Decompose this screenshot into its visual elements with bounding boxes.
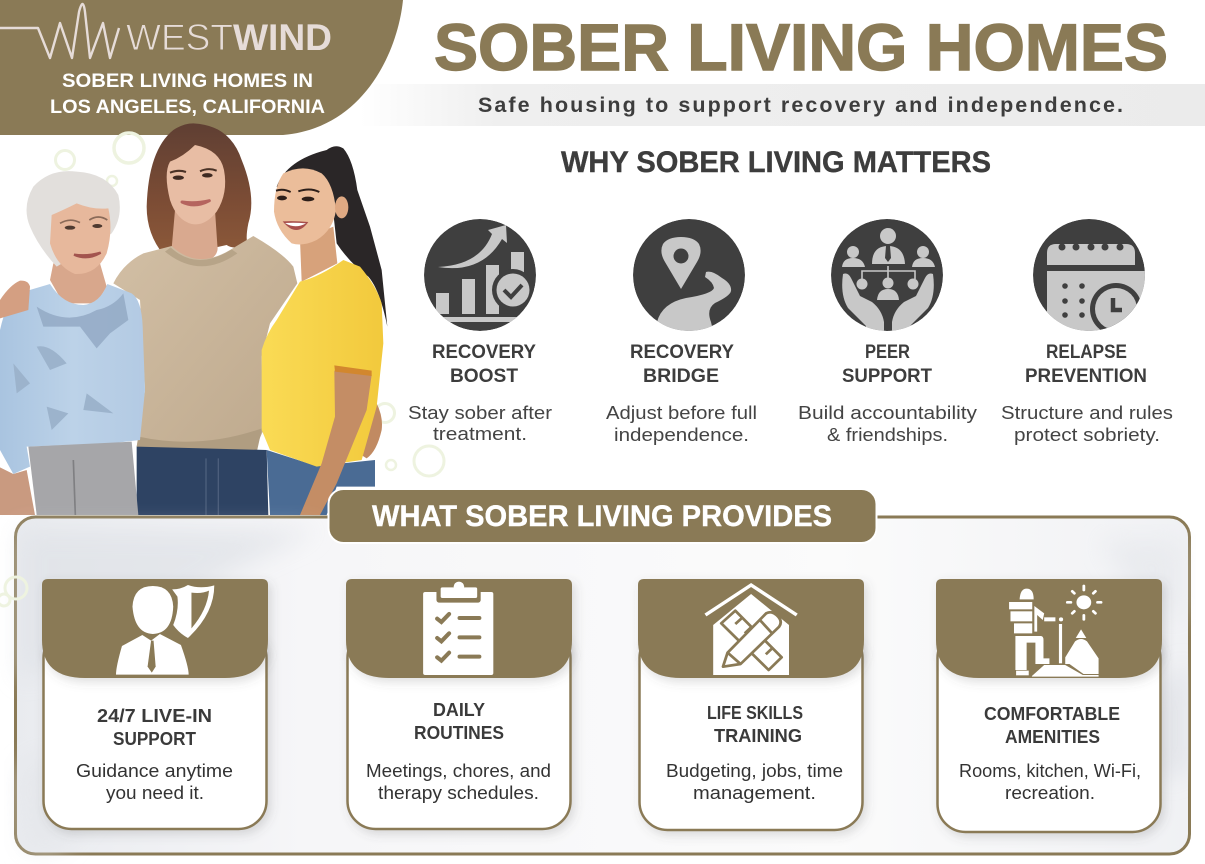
icon: hiker with sun and mountain <box>1009 586 1101 677</box>
panel heading pill: WHAT SOBER LIVING PROVIDES <box>372 500 832 533</box>
card: 24/7 live-in support <box>42 579 268 829</box>
description <box>366 761 551 803</box>
card: comfortable amenities <box>936 579 1162 832</box>
description: Budgeting, jobs, time <box>666 761 843 781</box>
label <box>1025 342 1147 387</box>
benefit: peer support <box>798 219 978 445</box>
title <box>414 700 504 743</box>
description <box>666 761 843 803</box>
description <box>959 761 1141 803</box>
title: ROUTINES <box>414 723 504 743</box>
description: treatment. <box>433 423 527 444</box>
description: Structure and rules <box>1001 402 1173 423</box>
benefit: relapse prevention <box>1001 219 1173 445</box>
subtitle bar background <box>360 84 1205 126</box>
description: & friendships. <box>827 424 948 445</box>
title: AMENITIES <box>1005 727 1100 747</box>
logo: Westwind: WEST <box>126 17 233 58</box>
label: RECOVERY <box>630 342 734 363</box>
badge text <box>50 70 325 118</box>
grandmother <box>0 171 145 515</box>
description <box>798 402 978 445</box>
description: Meetings, chores, and <box>366 761 551 781</box>
card: daily routines <box>346 579 572 829</box>
photo: three women <box>0 123 387 515</box>
subtitle: Safe housing to support recovery and independence. <box>478 93 1123 117</box>
benefit: recovery boost <box>408 219 552 444</box>
icon: map pin and road <box>633 219 745 335</box>
description: Adjust before full <box>606 402 757 423</box>
decorative bubbles <box>56 133 444 476</box>
logo: Westwind: WIND <box>233 17 332 58</box>
description: recreation. <box>1005 783 1095 803</box>
label <box>842 342 932 387</box>
icon: growth chart <box>424 219 536 331</box>
benefit: recovery bridge <box>606 219 757 445</box>
label: BRIDGE <box>643 366 719 387</box>
daughter <box>262 146 387 515</box>
label: SUPPORT <box>842 366 932 387</box>
label: RELAPSE <box>1046 342 1127 363</box>
label: RECOVERY <box>432 342 536 363</box>
label <box>432 342 536 387</box>
description <box>1001 402 1173 445</box>
badge text: SOBER LIVING HOMES IN <box>62 70 313 92</box>
title <box>97 706 212 749</box>
title: LIFE SKILLS <box>707 703 803 723</box>
description: you need it. <box>106 783 204 803</box>
logo: Westwind <box>0 4 332 58</box>
description: management. <box>693 783 816 803</box>
description: Rooms, kitchen, Wi-Fi, <box>959 761 1141 781</box>
panel: what sober living provides <box>0 489 1190 854</box>
description: therapy schedules. <box>378 783 539 803</box>
icon: calendar and clock <box>1033 219 1145 335</box>
title: SOBER LIVING HOMES <box>434 10 1168 84</box>
label: PEER <box>865 342 910 363</box>
title: 24/7 LIVE-IN <box>97 706 212 726</box>
title: TRAINING <box>714 726 802 746</box>
title: DAILY <box>433 700 485 720</box>
description <box>606 402 757 445</box>
icon: clipboard <box>423 582 493 675</box>
icon: people in hands <box>831 219 943 340</box>
title: COMFORTABLE <box>984 704 1120 724</box>
description: Build accountability <box>798 402 978 423</box>
header badge <box>0 0 403 135</box>
badge text: LOS ANGELES, CALIFORNIA <box>50 96 325 118</box>
title <box>984 704 1120 747</box>
description: Stay sober after <box>408 402 552 423</box>
description: Guidance anytime <box>76 761 233 781</box>
description: protect sobriety. <box>1014 424 1160 445</box>
description <box>408 402 552 444</box>
description <box>76 761 233 803</box>
icon: house with ruler and pencil <box>705 585 797 675</box>
title: SUPPORT <box>113 729 196 749</box>
description: independence. <box>614 424 749 445</box>
mother <box>113 123 297 515</box>
title <box>707 703 803 746</box>
icon: person with shield <box>116 585 214 675</box>
section heading: why sober living matters: WHY SOBER LIVING MATTERS <box>561 146 991 179</box>
label: BOOST <box>450 366 518 387</box>
decorative bubbles <box>0 577 27 606</box>
panel heading pill <box>328 489 876 543</box>
card: life skills training <box>638 579 864 830</box>
label <box>630 342 734 387</box>
label: PREVENTION <box>1025 366 1147 387</box>
